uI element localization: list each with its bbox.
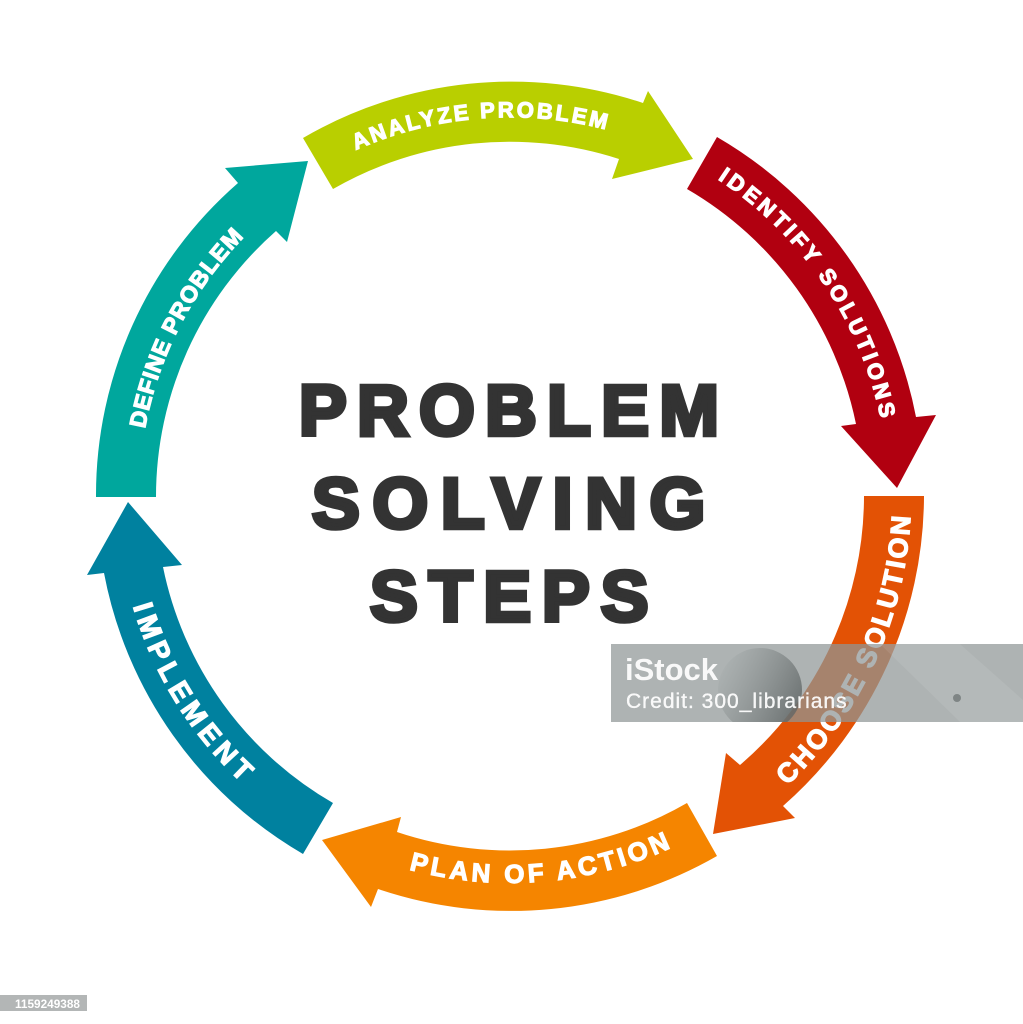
arrow: analyze problem [303, 82, 693, 189]
image id tag: 1159249388 [15, 997, 80, 1011]
label: plan of action: PLAN OF ACTION [410, 831, 670, 884]
label: choose solution: CHOOSE SOLUTION [777, 516, 911, 782]
watermark band: Credit: 300_librarians [626, 690, 848, 713]
title: SOLVING [312, 464, 718, 544]
label: identify solutions: IDENTIFY SOLUTIONS [718, 166, 896, 418]
title [299, 371, 729, 637]
watermark band [611, 644, 1023, 722]
arrow: implement [87, 502, 333, 854]
arrow: plan of action [322, 803, 717, 911]
arrow: choose solution [713, 496, 924, 834]
watermark band: iStock [625, 652, 719, 687]
arrow: define problem [96, 161, 308, 497]
title: PROBLEM [299, 371, 729, 451]
label: analyze problem: ANALYZE PROBLEM [354, 102, 608, 151]
label: define problem: DEFINE PROBLEM [129, 226, 244, 428]
image id tag [0, 995, 87, 1011]
arrow: identify solutions [687, 137, 936, 488]
label: implement: IMPLEMENT [132, 602, 256, 779]
title: STEPS [370, 557, 659, 637]
